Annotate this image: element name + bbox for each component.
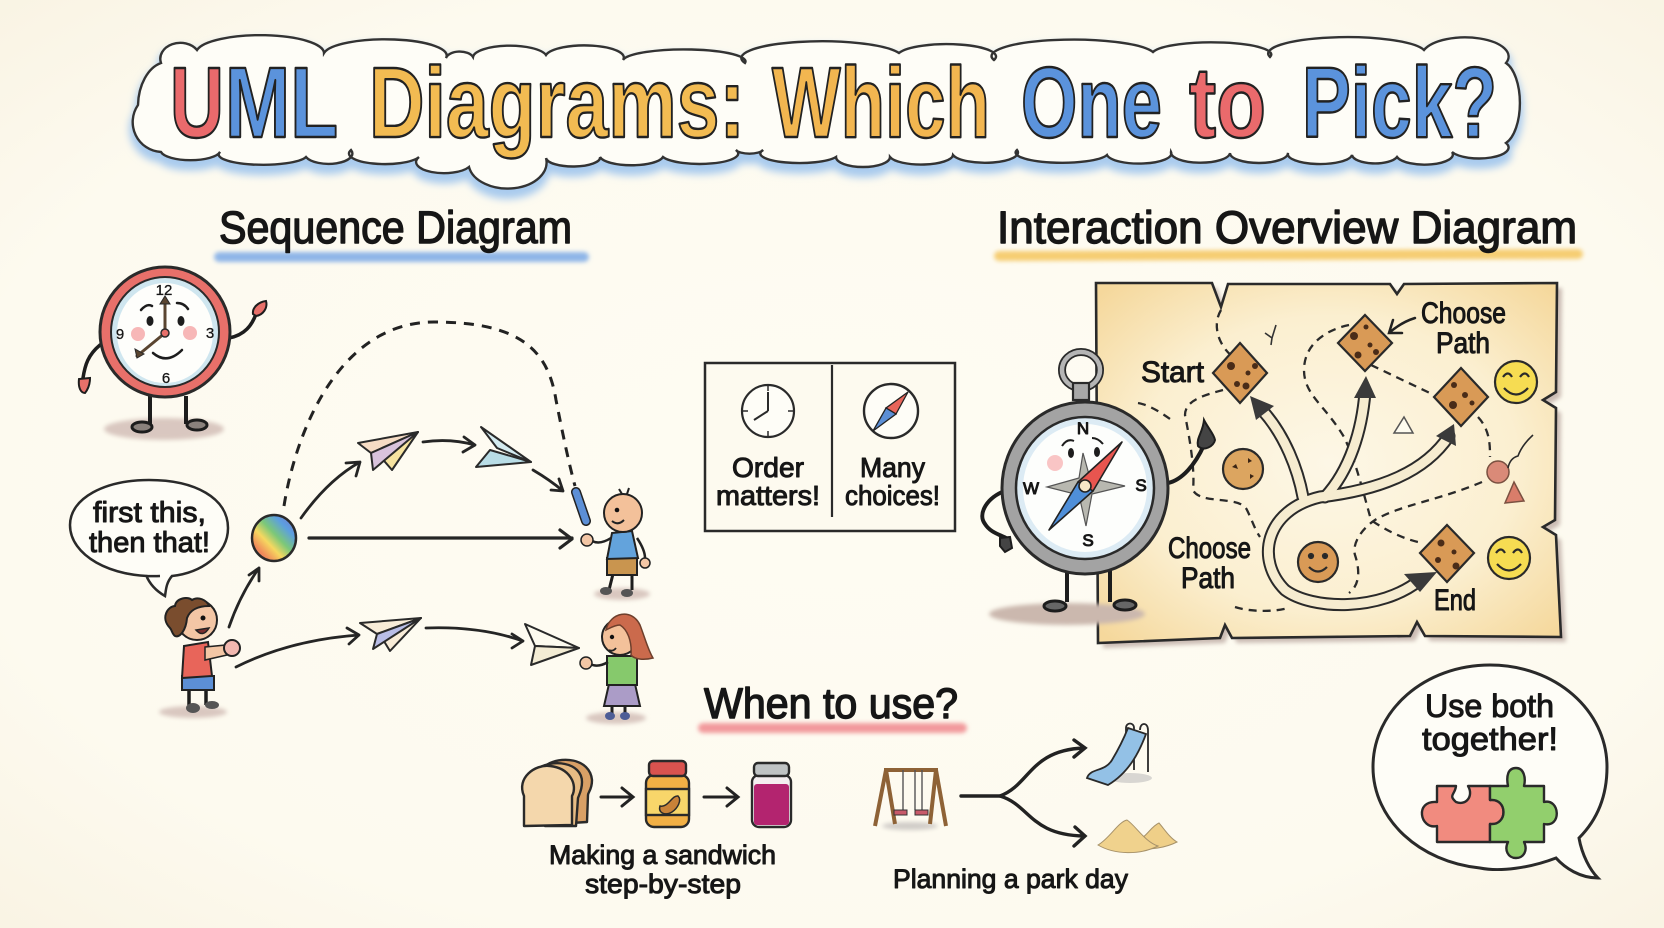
compass character: [982, 352, 1215, 625]
speech bubble: use both together: [1373, 665, 1607, 878]
title text: Which: [772, 47, 990, 159]
title text: Diagrams:: [369, 47, 745, 159]
map labels: Path: [1436, 327, 1490, 360]
clock numbers: 9: [116, 326, 124, 343]
compass needle: [1049, 442, 1122, 530]
ball: [252, 515, 296, 561]
clock character: [79, 267, 266, 440]
compass letters: N: [1077, 419, 1089, 438]
icon: compass: [864, 384, 918, 438]
clock face: [100, 267, 230, 397]
speech bubble: first this, then that: then that!: [89, 527, 210, 559]
compass arms: [982, 420, 1215, 552]
forked arrow: [961, 740, 1085, 846]
map labels: Choose: [1421, 297, 1506, 330]
icon: puzzle pieces: [1422, 768, 1557, 858]
map labels: Start: [1141, 356, 1205, 389]
map labels: Path: [1181, 562, 1235, 595]
heading: When to use?: When to use?: [704, 680, 958, 728]
sandwich label: [549, 840, 776, 899]
compass letters: S: [1135, 476, 1147, 495]
map labels: End: [1434, 584, 1476, 617]
boy throwing: [159, 598, 240, 718]
clock arms: [79, 301, 266, 393]
cookie diamonds: [1213, 315, 1488, 582]
paper plane 3: [360, 618, 421, 651]
title text: to: [1189, 47, 1266, 159]
icon: jelly jar: [752, 763, 791, 827]
sequence arrows: [229, 437, 572, 667]
clock legs and feet: [132, 396, 207, 432]
map labels: Choose: [1168, 532, 1251, 565]
clock numbers: 6: [162, 370, 170, 387]
title text: [170, 47, 1497, 159]
icon: slide: [1087, 724, 1152, 785]
sandwich label: step-by-step: [585, 869, 741, 899]
wide path arrows: [1250, 376, 1456, 605]
arrow: [704, 788, 738, 806]
cloud outline: [133, 35, 1520, 196]
label: many choices: [845, 452, 940, 511]
arrow: [601, 788, 633, 806]
title text: U: [170, 47, 224, 159]
icon: peanut butter jar: [646, 761, 689, 827]
sandwich sequence: [522, 760, 791, 899]
park plan: [875, 724, 1177, 894]
icon: clock: [742, 385, 794, 437]
paper plane 4: [525, 624, 579, 665]
clock shadow: [104, 418, 224, 440]
title text: One: [1021, 47, 1162, 159]
title banner: [133, 35, 1520, 196]
compass face: [1047, 438, 1103, 471]
label: order matters: matters!: [716, 480, 820, 511]
comparison box: [705, 363, 955, 531]
cookie chips: [1227, 324, 1474, 570]
arrow to choose path: [1389, 318, 1415, 333]
title text: Pick?: [1302, 47, 1497, 159]
clock numbers: 3: [206, 325, 214, 342]
map paper: [1096, 283, 1566, 648]
receiver boy: [581, 488, 650, 600]
smileys: [1488, 361, 1537, 579]
clock numbers: [116, 282, 214, 387]
paper plane 1: [358, 432, 418, 470]
label: order matters: Order: [732, 452, 804, 483]
icon: sand piles: [1098, 820, 1177, 853]
map bits: [1265, 325, 1533, 503]
compass top ring: [1062, 352, 1100, 400]
round cookies: [1223, 449, 1338, 582]
compass body: [1002, 402, 1168, 574]
compass letters: W: [1023, 479, 1039, 498]
heading: Sequence Diagram: Sequence Diagram: [219, 202, 572, 253]
dashed arc to receiver: [284, 322, 575, 506]
compass letters: [1023, 419, 1147, 550]
heading: Interaction Overview Diagram: Interaction Overview Diagram: [997, 202, 1577, 253]
compass legs: [1044, 568, 1136, 611]
speech bubble: first this, then that: first this,: [93, 497, 206, 529]
map labels: [1141, 297, 1506, 617]
compass shadow: [989, 603, 1145, 625]
clock numbers: 12: [156, 282, 172, 299]
speech bubble: use both together: Use both: [1425, 688, 1554, 724]
label: many choices: choices!: [845, 480, 940, 511]
compass rose: [1047, 453, 1125, 526]
park label: Planning a park day: [893, 864, 1128, 894]
label: order matters: [716, 452, 820, 511]
paper plane 2: [476, 427, 531, 467]
title text: ML: [225, 47, 338, 159]
dashed paths: [1138, 310, 1490, 611]
clock face features: [131, 296, 197, 358]
sandwich label: Making a sandwich: [549, 840, 776, 870]
compass letters: S: [1082, 531, 1094, 550]
speech bubble: first this, then that: [70, 480, 228, 596]
receiver girl: [580, 614, 653, 724]
icon: swing: [875, 770, 946, 830]
treasure map: [1096, 283, 1566, 648]
speech bubble: use both together: together!: [1422, 721, 1558, 757]
label: many choices: Many: [860, 452, 925, 483]
icon: bread: [522, 760, 592, 826]
blue stick: [576, 492, 586, 521]
